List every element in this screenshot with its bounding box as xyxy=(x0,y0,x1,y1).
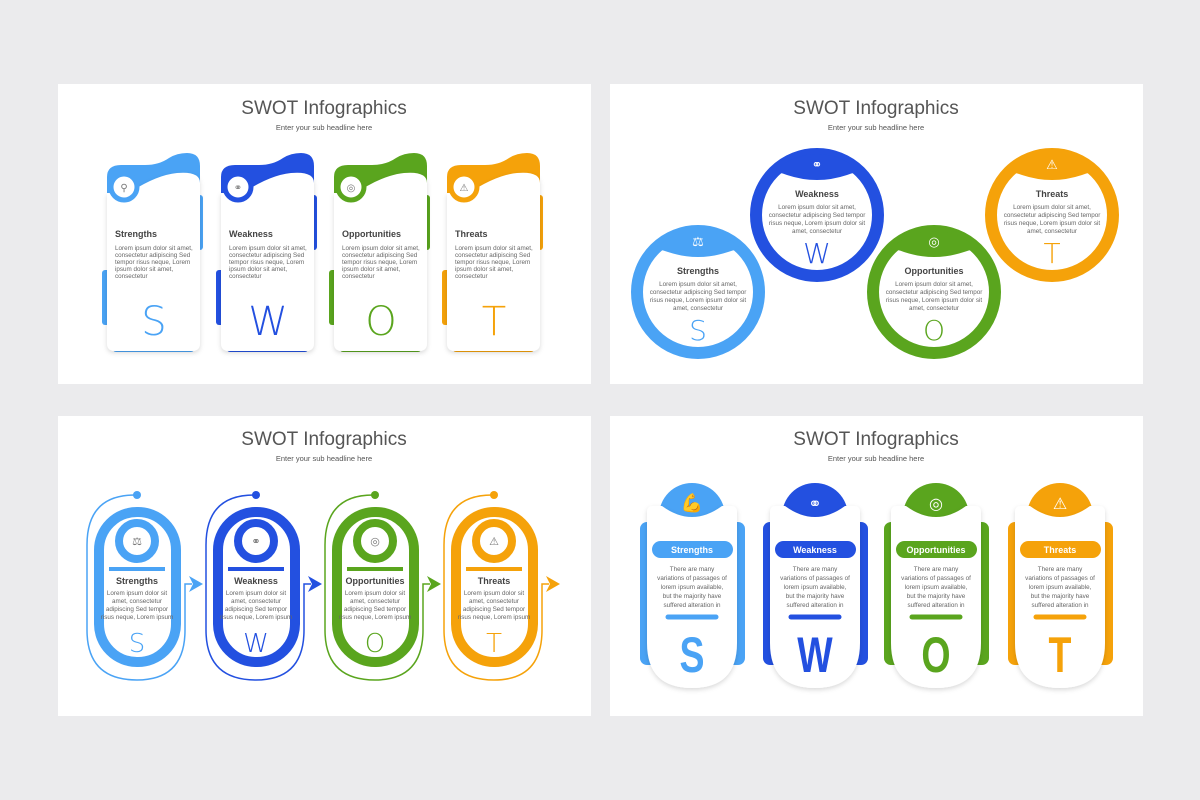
subtitle: Enter your sub headline here xyxy=(276,454,372,463)
pill: Strengths: risus neque, Lorem ipsum xyxy=(101,614,173,621)
circle: Threats: amet, consectetur xyxy=(1027,228,1077,235)
tab card: Opportunities: O xyxy=(921,628,951,683)
circle: Strengths: Strengths xyxy=(677,266,719,276)
circle: Strengths: ⚖ xyxy=(692,234,704,249)
tab card: Strengths xyxy=(640,483,745,688)
card: Strengths xyxy=(102,153,203,352)
card: Threats xyxy=(442,153,543,352)
circle: Weakness xyxy=(747,145,887,276)
subtitle: Enter your sub headline here xyxy=(828,123,924,132)
card: Weakness: ipsum dolor sit amet, xyxy=(229,266,287,273)
pill: Threats: T xyxy=(486,629,502,659)
card: Opportunities xyxy=(329,153,430,352)
circle: Opportunities: risus neque, Lorem ipsum dolor sit xyxy=(886,297,982,304)
card: Strengths: ipsum dolor sit amet, xyxy=(115,266,173,273)
title: SWOT Infographics xyxy=(793,429,959,450)
circle: Weakness: ⚭ xyxy=(812,157,822,172)
card: Strengths: consectetur xyxy=(115,273,148,280)
pill: Strengths: ⚖ xyxy=(132,536,142,548)
card: Weakness: Lorem ipsum dolor sit amet, xyxy=(229,245,307,252)
circle: Weakness: amet, consectetur xyxy=(792,228,842,235)
circle: Threats xyxy=(982,145,1122,276)
title: SWOT Infographics xyxy=(241,98,407,119)
pill: Threats: adipiscing Sed tempor xyxy=(463,606,525,613)
card: Threats: T xyxy=(482,299,506,345)
pill: Threats: risus neque, Lorem ipsum xyxy=(458,614,530,621)
pill: Weakness: amet, consectetur xyxy=(231,598,281,605)
panel: bottom-left pills xyxy=(58,416,591,716)
pill: Opportunities xyxy=(325,491,441,680)
pill: Opportunities: Lorem ipsum dolor sit xyxy=(345,590,405,597)
tab card: Opportunities xyxy=(884,483,989,688)
card: Weakness: tempor risus neque, Lorem xyxy=(229,259,304,266)
pill: Weakness: Lorem ipsum dolor sit xyxy=(226,590,286,597)
panel: top-right circles xyxy=(610,84,1143,384)
tab card: Opportunities: but the majority have xyxy=(907,593,966,600)
tab card: Weakness: but the majority have xyxy=(786,593,845,600)
circle: Opportunities xyxy=(864,222,1004,353)
panel: top-left card style xyxy=(58,84,591,384)
card: Opportunities: consectetur xyxy=(342,273,375,280)
circle: Strengths: risus neque, Lorem ipsum dolor sit xyxy=(650,297,746,304)
card: Strengths: Strengths xyxy=(115,229,157,239)
circle: Weakness: consectetur adipiscing Sed tempor xyxy=(769,212,865,219)
pill: Weakness: risus neque, Lorem ipsum xyxy=(220,614,292,621)
circle: Threats: T xyxy=(1043,237,1061,270)
circle: Threats: Threats xyxy=(1036,189,1068,199)
card: Opportunities: ipsum dolor sit amet, xyxy=(342,266,400,273)
card: Threats: ⚠ xyxy=(460,183,469,194)
card: Threats: Lorem ipsum dolor sit amet, xyxy=(455,245,533,252)
pill: Threats: Lorem ipsum dolor sit xyxy=(464,590,524,597)
subtitle: Enter your sub headline here xyxy=(828,454,924,463)
pill: Strengths: S xyxy=(129,629,145,659)
tab card: Weakness: suffered alteration in xyxy=(787,602,844,609)
circle: Opportunities: ◎ xyxy=(928,234,940,249)
tab card: Weakness: ⚭ xyxy=(808,496,822,513)
circle: Opportunities: O xyxy=(923,314,945,347)
tab card: Threats: but the majority have xyxy=(1031,593,1090,600)
circle: Weakness: risus neque, Lorem ipsum dolor sit xyxy=(769,220,865,227)
pill: Opportunities: ◎ xyxy=(370,536,380,548)
pill: Weakness: W xyxy=(243,629,269,659)
circle: Strengths xyxy=(628,222,768,353)
tab card: Weakness: lorem ipsum available, xyxy=(784,584,847,591)
pill: Opportunities: Opportunities xyxy=(346,576,404,586)
subtitle: Enter your sub headline here xyxy=(276,123,372,132)
tab card: Strengths: variations of passages of xyxy=(657,575,727,582)
card: Opportunities: ◎ xyxy=(347,183,356,194)
pill: Opportunities: adipiscing Sed tempor xyxy=(344,606,406,613)
tab card: Weakness: W xyxy=(797,628,833,683)
pill: Strengths: Lorem ipsum dolor sit xyxy=(107,590,167,597)
card: Weakness: ⚭ xyxy=(234,183,242,194)
tab card: Strengths: lorem ipsum available, xyxy=(661,584,724,591)
circle: Weakness: Weakness xyxy=(795,189,839,199)
circle: Threats: ⚠ xyxy=(1046,157,1058,172)
tab card: Strengths: suffered alteration in xyxy=(664,602,721,609)
pill: Strengths xyxy=(87,491,203,680)
pill: Strengths: Strengths xyxy=(116,576,158,586)
tab card: Threats: Threats xyxy=(1044,545,1076,555)
tab card: Threats xyxy=(1008,483,1113,688)
tab card: Opportunities: Opportunities xyxy=(906,545,966,555)
circle: Strengths: Lorem ipsum dolor sit amet, xyxy=(659,281,737,288)
card: Strengths: ⚲ xyxy=(120,183,128,194)
tab card: Weakness: variations of passages of xyxy=(780,575,850,582)
tab card: Opportunities: lorem ipsum available, xyxy=(905,584,968,591)
pill: Weakness: Weakness xyxy=(234,576,278,586)
card: Opportunities: O xyxy=(365,299,397,345)
tab card: Opportunities: ◎ xyxy=(929,496,943,513)
pill: Threats: amet, consectetur xyxy=(469,598,519,605)
tab card: Threats: lorem ipsum available, xyxy=(1029,584,1092,591)
card: Strengths: tempor risus neque, Lorem xyxy=(115,259,190,266)
card: Threats: Threats xyxy=(455,229,488,239)
card: Threats: tempor risus neque, Lorem xyxy=(455,259,530,266)
panel: bottom-right tabs xyxy=(610,416,1143,716)
tab card: Strengths: S xyxy=(679,628,705,683)
card: Weakness: consectetur xyxy=(229,273,262,280)
tab card: Weakness xyxy=(763,483,868,688)
circle: Opportunities: Lorem ipsum dolor sit amet, xyxy=(895,281,973,288)
card: Weakness: W xyxy=(248,299,288,345)
tab card: Strengths: but the majority have xyxy=(663,593,722,600)
card: Threats: consectetur xyxy=(455,273,488,280)
tab card: Strengths: Strengths xyxy=(671,545,713,555)
title: SWOT Infographics xyxy=(241,429,407,450)
card: Strengths: S xyxy=(141,299,167,345)
tab card: Opportunities: variations of passages of xyxy=(901,575,971,582)
circle: Strengths: consectetur adipiscing Sed tempor xyxy=(650,289,746,296)
circle: Weakness: W xyxy=(803,237,831,270)
tab card: Threats: There are many xyxy=(1038,566,1083,573)
card: Opportunities: Lorem ipsum dolor sit amet, xyxy=(342,245,420,252)
circle: Threats: consectetur adipiscing Sed tempor xyxy=(1004,212,1100,219)
card: Opportunities: tempor risus neque, Lorem xyxy=(342,259,417,266)
tab card: Threats: ⚠ xyxy=(1053,496,1067,513)
pill: Strengths: adipiscing Sed tempor xyxy=(106,606,168,613)
tab card: Opportunities: suffered alteration in xyxy=(908,602,965,609)
pill: Opportunities: O xyxy=(365,629,385,659)
pill: Threats: Threats xyxy=(478,576,510,586)
tab card: Weakness: Weakness xyxy=(793,545,837,555)
pill: Threats: ⚠ xyxy=(489,536,499,548)
card: Weakness: Weakness xyxy=(229,229,273,239)
tab card: Weakness: There are many xyxy=(793,566,838,573)
tab card: Threats: T xyxy=(1049,628,1071,683)
card: Opportunities: Opportunities xyxy=(342,229,401,239)
pill: Opportunities: amet, consectetur xyxy=(350,598,400,605)
tab card: Threats: suffered alteration in xyxy=(1032,602,1089,609)
pill: Threats xyxy=(444,491,560,680)
tab card: Strengths: 💪 xyxy=(681,492,703,513)
pill: Strengths: amet, consectetur xyxy=(112,598,162,605)
tab card: Opportunities: There are many xyxy=(914,566,959,573)
card: Threats: ipsum dolor sit amet, xyxy=(455,266,513,273)
card: Weakness: consectetur adipiscing Sed xyxy=(229,252,305,259)
card: Opportunities: consectetur adipiscing Sed xyxy=(342,252,418,259)
pill: Weakness: ⚭ xyxy=(251,536,261,548)
circle: Opportunities: amet, consectetur xyxy=(909,305,959,312)
circle: Strengths: S xyxy=(689,314,707,347)
pill: Opportunities: risus neque, Lorem ipsum xyxy=(339,614,411,621)
card: Threats: consectetur adipiscing Sed xyxy=(455,252,531,259)
circle: Opportunities: Opportunities xyxy=(904,266,964,276)
card: Strengths: consectetur adipiscing Sed xyxy=(115,252,191,259)
card: Strengths: Lorem ipsum dolor sit amet, xyxy=(115,245,193,252)
card: Weakness xyxy=(216,153,317,352)
circle: Strengths: amet, consectetur xyxy=(673,305,723,312)
tab card: Threats: variations of passages of xyxy=(1025,575,1095,582)
pill: Weakness: adipiscing Sed tempor xyxy=(225,606,287,613)
tab card: Strengths: There are many xyxy=(670,566,715,573)
circle: Threats: Lorem ipsum dolor sit amet, xyxy=(1013,204,1091,211)
circle: Opportunities: consectetur adipiscing Sed tempor xyxy=(886,289,982,296)
circle: Threats: risus neque, Lorem ipsum dolor sit xyxy=(1004,220,1100,227)
circle: Weakness: Lorem ipsum dolor sit amet, xyxy=(778,204,856,211)
title: SWOT Infographics xyxy=(793,98,959,119)
pill: Weakness xyxy=(206,491,322,680)
